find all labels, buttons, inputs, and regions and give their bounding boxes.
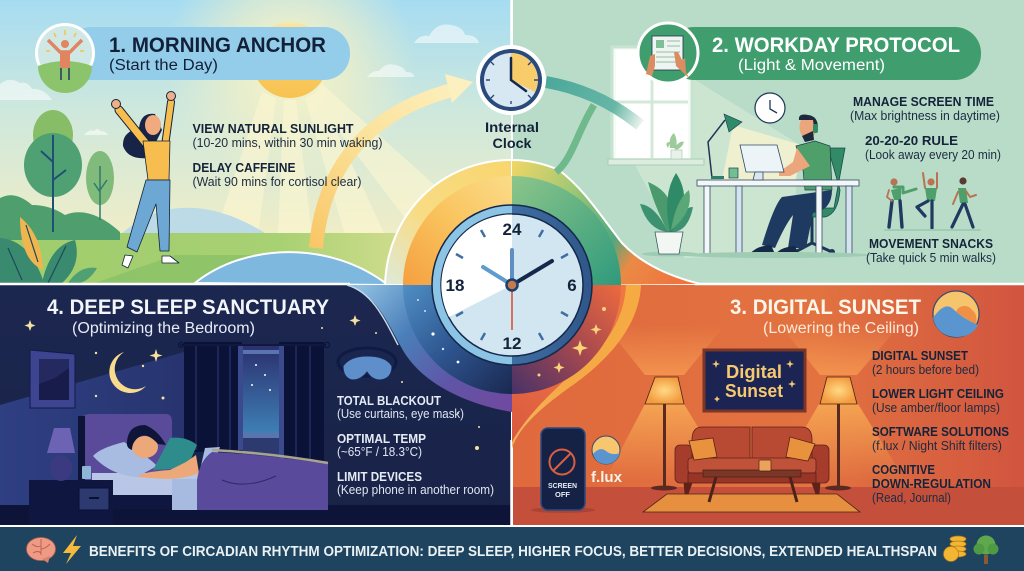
heading: morning anchor [35, 23, 350, 93]
water glass [82, 466, 91, 479]
icon: f.lux [592, 436, 620, 464]
raised arms [119, 110, 148, 146]
bushes [0, 195, 120, 240]
man at computer [750, 115, 832, 255]
bed [78, 414, 328, 510]
heading: digital sunset [730, 296, 921, 337]
swirl: workday [512, 160, 700, 285]
icon: lightning bolt [63, 535, 81, 564]
desk [697, 180, 859, 255]
text block: sleep tips: (Use curtains, eye mask) [337, 407, 464, 421]
desk lamp [708, 114, 742, 179]
text block: sunset tips: (Use amber/floor lamps) [872, 401, 1000, 415]
mattress [92, 473, 202, 495]
internal clock label [485, 119, 539, 151]
hour labels: 24 [503, 220, 522, 239]
internal clock label: Internal [485, 119, 539, 135]
central 24-hour clock: 18 [446, 276, 464, 295]
bedside lamp [47, 428, 75, 481]
floor [0, 505, 511, 525]
swirl band: sunset [512, 285, 641, 448]
bedroom wall [0, 352, 184, 505]
right floor lamp [820, 377, 857, 490]
title: 1. MORNING ANCHOR [109, 34, 326, 57]
blanket [197, 452, 328, 510]
icon: sunset badge [933, 291, 979, 337]
heading: digital sunset: 3. DIGITAL SUNSET [730, 296, 921, 319]
eye mask [338, 348, 396, 380]
text block: sunset tips: SOFTWARE SOLUTIONS [872, 425, 1009, 439]
blackout curtains [178, 342, 330, 464]
stars: bedroom [24, 315, 480, 450]
panel: workday protocol [513, 0, 1024, 283]
arrow: internal clock to workday [546, 82, 640, 125]
icon: brain [26, 538, 56, 563]
legs [127, 180, 170, 252]
text block: workday tips: 20-20-20 RULE [865, 134, 958, 148]
movement figures [885, 173, 980, 230]
ring quadrant: morning [403, 176, 512, 285]
rug [643, 494, 860, 512]
ring stars [417, 299, 606, 376]
heading: deep sleep sanctuary: (Optimizing the Bedroom) [72, 320, 255, 337]
ring quadrant: workday [512, 176, 621, 285]
torso [796, 141, 832, 190]
chair [794, 148, 845, 255]
text block: workday tips: (Max brightness in daytime) [850, 109, 1000, 123]
benefits text: BENEFITS OF CIRCADIAN RHYTHM OPTIMIZATION: DEEP SLEEP, HIGHER FOCUS, BETTER DECISIONS, EXTENDED HEALTHSPAN [89, 544, 937, 560]
clock hands [511, 285, 513, 330]
potted plant [640, 173, 698, 256]
central 24-hour clock [432, 205, 592, 365]
foreground leaves [0, 217, 97, 283]
icon: stretching person [35, 23, 95, 93]
sofa [675, 427, 829, 494]
text block: workday tips: MOVEMENT SNACKS [869, 237, 993, 251]
panel: digital sunset [513, 285, 1024, 525]
footer banner [0, 527, 1024, 571]
window light beam [635, 78, 800, 258]
central 24-hour clock: 6 [567, 276, 577, 295]
text block: sunset tips: (Read, Journal) [872, 491, 951, 505]
sheet fold [172, 447, 220, 510]
tree: small [86, 151, 114, 220]
tree: large [24, 110, 82, 232]
text block: sleep tips [337, 394, 494, 497]
clock face [441, 214, 583, 356]
shoes [750, 245, 799, 255]
face [145, 115, 161, 135]
text block: sunset tips: COGNITIVE [872, 463, 935, 477]
subtitle: (Light & Movement) [738, 57, 885, 74]
sill plant [666, 133, 684, 150]
subtitle: (Start the Day) [109, 57, 218, 74]
distant hill [122, 208, 265, 233]
sun [252, 22, 328, 98]
framed picture [30, 350, 75, 408]
figure 3 [952, 177, 976, 227]
phone: screen off: SCREEN [548, 483, 577, 490]
heading: workday protocol [638, 23, 981, 83]
icon: coins [944, 536, 966, 562]
wall clock [755, 93, 785, 123]
icon: document in hands [638, 23, 698, 83]
figure 2 [917, 173, 937, 228]
meadow [0, 233, 400, 283]
phone: screen off [531, 428, 595, 513]
arm [779, 148, 810, 176]
window [608, 47, 704, 165]
phone: screen off: OFF [555, 492, 571, 499]
torso [143, 141, 170, 180]
nightstand [29, 480, 113, 525]
heading: deep sleep sanctuary [47, 296, 329, 337]
arrow: sunlight to internal clock [316, 74, 473, 248]
headboard edge [78, 416, 85, 505]
text block: workday tips [850, 95, 1001, 265]
shoes [122, 255, 133, 268]
sleeper [127, 425, 199, 479]
grass shadow [95, 255, 310, 283]
figure: woman stretching [112, 92, 179, 268]
heading: digital sunset: (Lowering the Ceiling) [763, 320, 919, 337]
window [242, 345, 280, 468]
panel: morning anchor [0, 0, 511, 285]
internal clock label: Clock [492, 135, 532, 151]
text block: workday tips: (Take quick 5 min walks) [866, 251, 996, 265]
f.lux label: f.lux [591, 469, 623, 486]
text block: sunset tips: DIGITAL SUNSET [872, 349, 968, 363]
text block: sunset tips: DOWN-REGULATION [872, 477, 991, 491]
text block: sunset tips: (2 hours before bed) [872, 363, 979, 377]
text block: morning tips: (Wait 90 mins for cortisol clear) [192, 175, 362, 189]
panel: deep sleep sanctuary [0, 285, 511, 525]
swirl: sunset [512, 285, 641, 448]
blue hill [195, 252, 388, 285]
wall sign [704, 350, 805, 411]
floor shadow [681, 252, 871, 258]
text block: workday tips: MANAGE SCREEN TIME [853, 95, 994, 109]
coffee table [703, 460, 801, 502]
connector to central clock [556, 105, 594, 172]
icon: tree [974, 536, 998, 564]
text block: sleep tips: LIMIT DEVICES [337, 470, 422, 484]
wall sign: Digital [726, 362, 782, 382]
text block: morning tips: DELAY CAFFEINE [192, 161, 296, 175]
text block: sunset tips [872, 349, 1009, 505]
internal clock icon [476, 45, 546, 115]
wall sign: Sunset [725, 381, 783, 401]
headboard [80, 414, 172, 505]
text block: sleep tips: (~65°F / 18.3°C) [337, 445, 422, 459]
hour ticks [456, 230, 568, 340]
mug [729, 168, 738, 178]
swirl: sleep [347, 285, 512, 412]
computer monitor [740, 145, 784, 180]
title: 2. WORKDAY PROTOCOL [712, 34, 960, 57]
text block: sunset tips: (f.lux / Night Shift filters) [872, 439, 1002, 453]
lamp light cones [605, 325, 905, 480]
head [800, 115, 816, 139]
text block: morning tips: (10-20 mins, within 30 min waking) [192, 136, 382, 150]
clouds [0, 24, 479, 135]
swirl edge: workday [512, 160, 700, 284]
hair [123, 114, 162, 158]
ring quadrant: sunset [512, 285, 621, 394]
text block: sleep tips: (Keep phone in another room) [337, 483, 494, 497]
text block: sleep tips: OPTIMAL TEMP [337, 432, 426, 446]
left floor lamp [645, 377, 684, 490]
text block: workday tips: (Look away every 20 min) [865, 148, 1001, 162]
floor [513, 487, 1024, 525]
sun glow [165, 0, 415, 187]
clock bezel [432, 205, 592, 365]
sun rays [215, 84, 440, 235]
legs [762, 190, 832, 248]
text block: sleep tips: TOTAL BLACKOUT [337, 394, 441, 408]
text block: sunset tips: LOWER LIGHT CEILING [872, 387, 1004, 401]
swirl edge: sleep [347, 285, 398, 345]
daylight sector [441, 214, 512, 317]
central 24-hour clock: 12 [503, 334, 521, 353]
headset [813, 124, 818, 133]
pillow [93, 442, 157, 477]
text block: morning tips [192, 122, 382, 189]
fists [112, 100, 120, 108]
text block: morning tips: VIEW NATURAL SUNLIGHT [192, 122, 354, 136]
desk lamp light [722, 125, 805, 180]
heading: deep sleep sanctuary: 4. DEEP SLEEP SANCTUARY [47, 296, 329, 319]
hair and beard [799, 115, 818, 142]
swirl: morning [385, 160, 512, 285]
figures ground [885, 229, 980, 231]
ring quadrant: sleep [403, 285, 512, 394]
moon [109, 352, 146, 393]
figure 1 [887, 178, 916, 227]
